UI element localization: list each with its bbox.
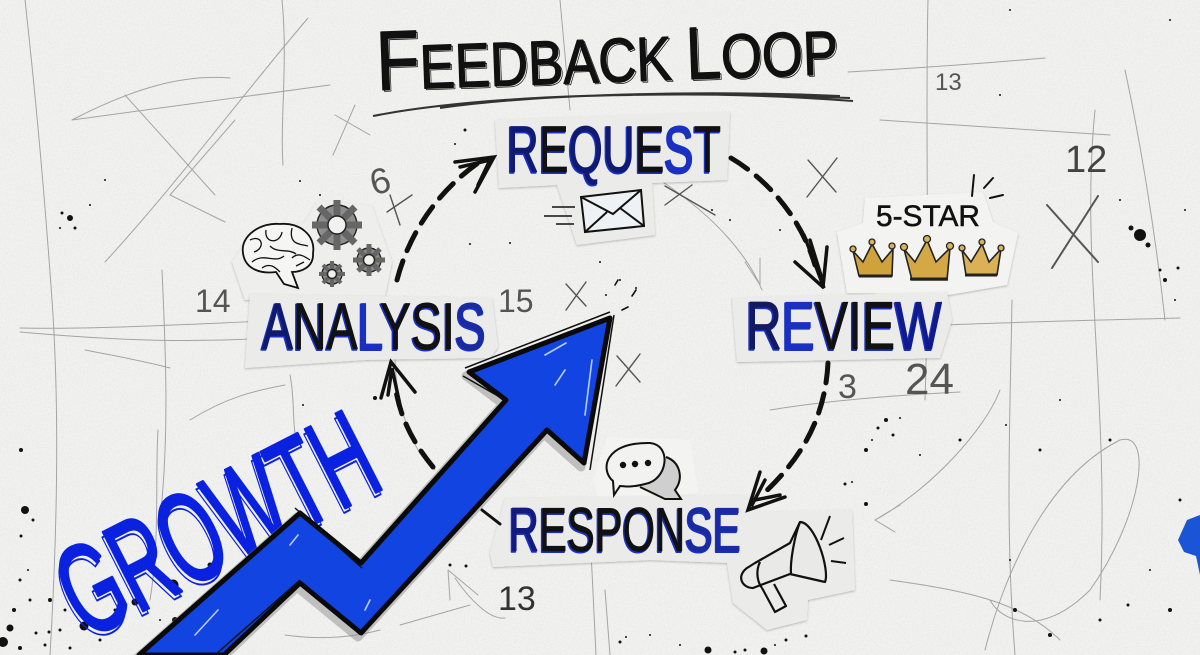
growth arrow: [136, 312, 614, 655]
request label: REQUEST: [507, 112, 721, 186]
response label: RESPONSE: [508, 497, 740, 566]
background sketch numbers and crosses: [195, 69, 1107, 618]
blue paint splash: [1178, 515, 1200, 575]
arrow highlights: [195, 343, 592, 635]
title: Feedback Loop: [373, 0, 853, 116]
analysis label: ANALYSIS: [261, 290, 485, 364]
icon: crown 2: [904, 240, 950, 280]
paper: speech bubbles: [593, 437, 698, 505]
5-star label: 5-STAR: [876, 200, 980, 233]
number 14: 14: [195, 283, 231, 319]
analysis label: ANALYSIS: [262, 289, 486, 363]
icon: brain: [243, 224, 313, 288]
dashed arrow: Review to Response: [748, 363, 828, 510]
icon: envelope: [544, 190, 644, 232]
paper: brain and gears: [232, 200, 392, 300]
paper: crowns and 5-star: [837, 192, 1018, 295]
growth label: GROWTH: [34, 384, 400, 655]
arrow ink accents: [215, 312, 614, 655]
5-star crowns group: [850, 175, 1004, 280]
icon: sparkle ticks: [972, 175, 1003, 198]
number 24: 24: [905, 355, 954, 404]
number 13 top right: 13: [935, 69, 962, 96]
title text: FEEDBACK LOOP: [376, 0, 841, 109]
arrow body: [139, 318, 610, 655]
number 6: 6: [365, 158, 395, 203]
title text: FEEDBACK LOOP: [374, 0, 839, 108]
request paper: [495, 112, 730, 245]
icon: crown 1: [853, 244, 893, 276]
icon: crown 3: [962, 244, 1001, 275]
dashed arrow: Request to Review: [731, 158, 827, 288]
dashed arrow: Analysis to Request: [397, 157, 494, 280]
icon: gears: [312, 200, 385, 287]
arrow pencil shadow: [136, 324, 607, 655]
small dashes near arrow tip: [615, 280, 636, 310]
analysis paper: [245, 294, 498, 368]
dashed arrow: Response to Analysis: [381, 362, 500, 524]
review label: REVIEW: [745, 289, 941, 365]
review label: REVIEW: [746, 288, 942, 364]
response paper: [490, 495, 855, 630]
icon: megaphone: [741, 516, 846, 612]
number 13 bottom: 13: [498, 580, 536, 618]
node: Response: [490, 443, 855, 630]
review paper: [732, 292, 952, 362]
number 12 right: 12: [1065, 139, 1107, 181]
number 15: 15: [498, 283, 534, 319]
node: Analysis: [243, 200, 498, 368]
number 3: 3: [838, 368, 857, 406]
growth label: [31, 384, 402, 655]
title underline: [373, 93, 853, 116]
crown jewels: [850, 236, 1004, 252]
sketch crosses: [387, 158, 1098, 386]
node: Request: [495, 112, 730, 245]
response label: RESPONSE: [509, 496, 741, 565]
icon: speech bubbles: [607, 443, 681, 499]
request label: REQUEST: [506, 113, 720, 187]
node: Review: [732, 288, 952, 365]
